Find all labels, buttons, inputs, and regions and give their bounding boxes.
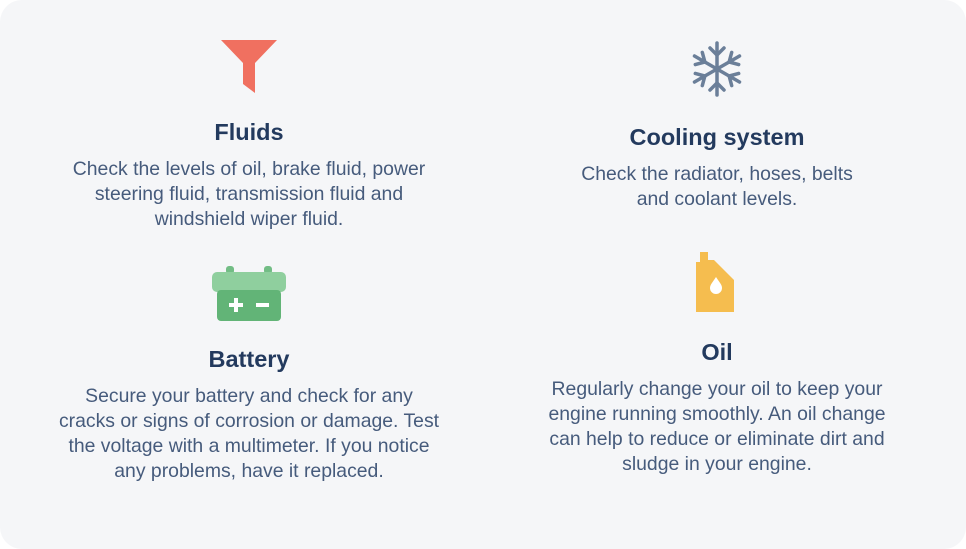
text: oil <box>548 378 886 475</box>
text: cooling: Check the radiator, hoses, belts <box>581 163 853 185</box>
icon: snowflake <box>692 41 742 97</box>
text: battery <box>59 385 439 482</box>
text: cooling <box>581 163 853 210</box>
text: cooling: and coolant levels. <box>637 188 797 210</box>
text: oil: engine running smoothly. An oil change <box>548 403 886 425</box>
heading: cooling system: Cooling system <box>630 124 804 150</box>
text: fluids <box>73 158 425 230</box>
icon: funnel <box>221 40 277 93</box>
icon: oil can <box>696 252 734 312</box>
text: fluids: steering fluid, transmission fluid and <box>95 183 403 205</box>
text: battery: any problems, have it replaced. <box>114 460 384 482</box>
text: fluids: Check the levels of oil, brake fluid, power <box>73 158 425 180</box>
text: battery: Secure your battery and check for any <box>85 385 413 407</box>
heading: fluids: Fluids <box>214 119 284 145</box>
text: oil: sludge in your engine. <box>622 453 812 475</box>
text: battery: cracks or signs of corrosion or damage. Test <box>59 410 439 432</box>
text: oil: Regularly change your oil to keep your <box>552 378 882 400</box>
text: fluids: windshield wiper fluid. <box>155 208 343 230</box>
text: oil: can help to reduce or eliminate dirt and <box>549 428 885 450</box>
icon: battery <box>212 266 286 321</box>
heading: oil: Oil <box>701 339 733 365</box>
text: battery: the voltage with a multimeter. If you notice <box>68 435 430 457</box>
heading: battery: Battery <box>208 346 289 372</box>
